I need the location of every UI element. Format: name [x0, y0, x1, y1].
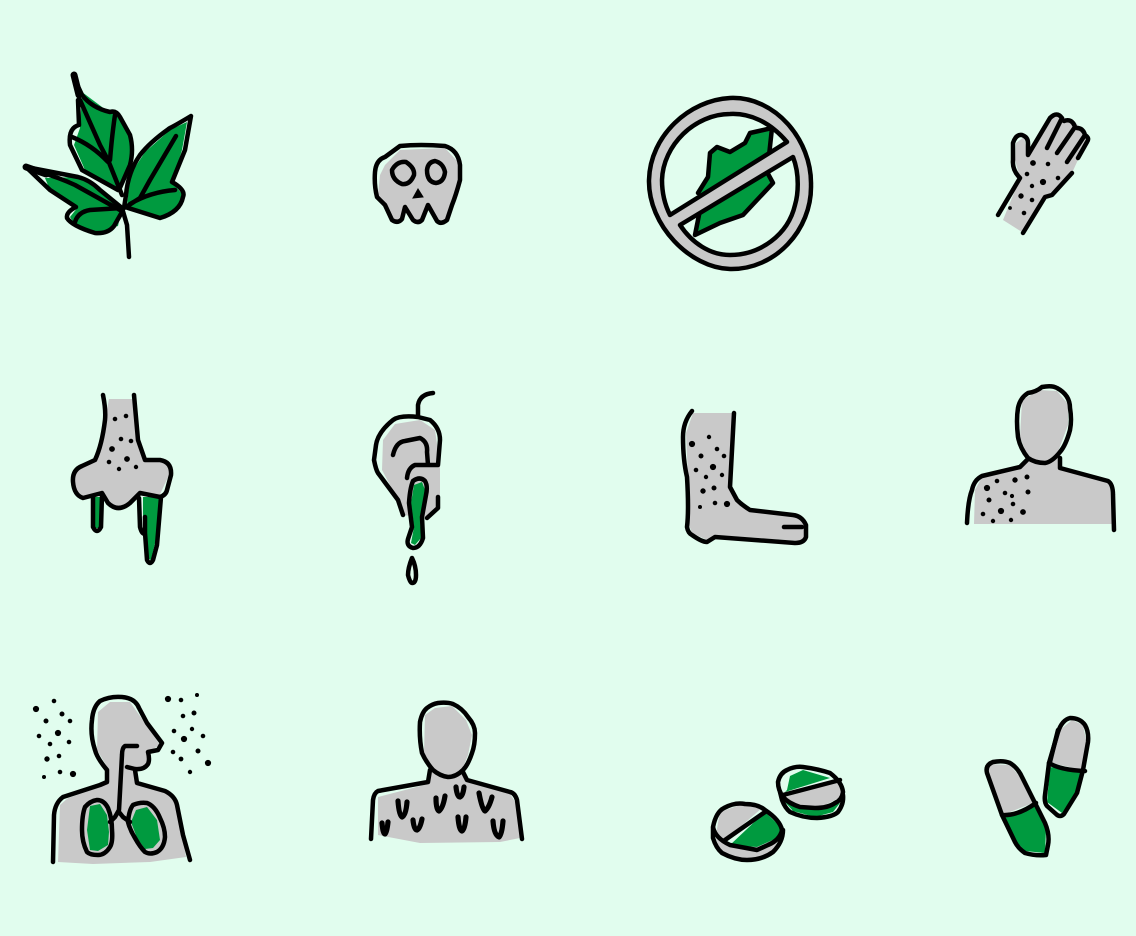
rash dots [981, 475, 1030, 523]
icon: ear with discharge [374, 393, 440, 583]
icon: capsules [987, 718, 1088, 855]
rash dots [107, 414, 138, 471]
icon: person with inhaled particles and lungs [33, 694, 211, 864]
rash dots [1009, 161, 1060, 215]
icon: foot with rash [683, 411, 806, 543]
leaf under sign [695, 128, 773, 235]
pill: lower left [713, 804, 783, 860]
blisters [382, 787, 503, 837]
capsule: upper right [1045, 718, 1088, 816]
icon: runny nose [73, 395, 171, 563]
icon: no poison ivy sign [649, 98, 811, 269]
pill: upper right [778, 767, 843, 818]
icon: person with shoulder rash [967, 386, 1114, 530]
rash dots [689, 435, 730, 508]
icon: skull [375, 145, 460, 223]
particles [33, 694, 211, 778]
icon: round pills [713, 767, 843, 860]
icon: person with blisters [371, 703, 522, 843]
capsule: lower left [987, 761, 1049, 855]
icon: hand with rash [998, 114, 1088, 233]
icon: poison ivy leaf [26, 75, 191, 257]
